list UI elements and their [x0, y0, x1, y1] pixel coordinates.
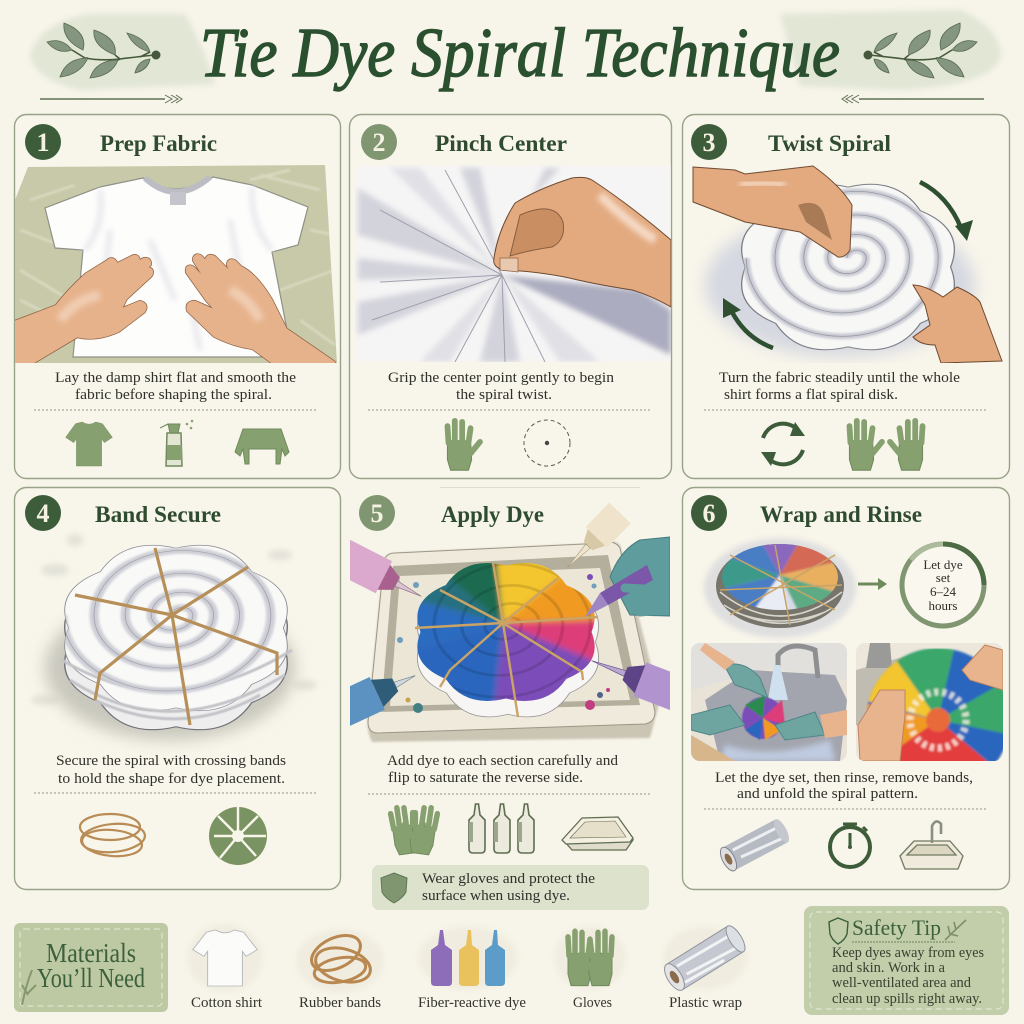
- description: Turn the fabric steadily until the whole: [719, 370, 960, 386]
- panel: step 2 pinch center: [350, 114, 672, 478]
- heading: Prep Fabric: [100, 131, 217, 156]
- heading: Twist Spiral: [768, 131, 891, 156]
- footer: materials: [14, 923, 749, 1012]
- illustration: tray and dye bottles: [331, 503, 686, 742]
- timer ring: let dye set 6-24 hours: [902, 544, 984, 626]
- illustration: shirt and hands: [14, 165, 339, 363]
- arrow: clockwise top right: [920, 182, 973, 241]
- item: plastic wrap: Plastic wrap: [669, 995, 742, 1011]
- icon: spray bottle: [160, 420, 193, 466]
- illustration: banded spiral: [31, 534, 317, 740]
- description: shirt forms a flat spiral disk.: [724, 387, 898, 403]
- description: Let the dye set, then rinse, remove bands,: [715, 770, 973, 786]
- materials label: Materials: [46, 938, 136, 968]
- photo: unfolding spiral: [856, 643, 1003, 771]
- metal tray: [368, 542, 660, 742]
- panel: step 3 twist spiral: [682, 114, 1010, 478]
- right leaf branch: [864, 23, 977, 78]
- description: Lay the damp shirt flat and smooth the: [55, 370, 296, 386]
- step number 3: 3: [702, 128, 716, 157]
- purple bottle and gloved hand: [585, 537, 670, 617]
- icon: sink: [900, 821, 963, 869]
- description: the spiral twist.: [456, 387, 552, 403]
- icon: gloves pair: [390, 804, 438, 855]
- heading: Pinch Center: [435, 131, 567, 156]
- arrow: clockwise bottom left: [723, 298, 773, 348]
- safety text: well-ventilated area and: [832, 975, 971, 991]
- item: cotton shirt: [191, 930, 263, 1011]
- icon: rubber bands: [80, 814, 146, 859]
- step number 6: [691, 495, 727, 531]
- item: rubber bands: [299, 928, 381, 1011]
- left leaf branch: [47, 23, 160, 78]
- item backdrops: [187, 924, 747, 993]
- heading: Band Secure: [95, 502, 221, 527]
- icon: shield: [829, 918, 848, 944]
- item: plastic wrap: [661, 923, 749, 1011]
- timer ring: let dye set 6-24 hours: 6–24: [930, 584, 956, 599]
- callout: protect surface: Wear gloves and protect the: [422, 871, 595, 887]
- materials label: [14, 923, 168, 1012]
- description: flip to saturate the reverse side.: [388, 770, 583, 786]
- pink bottle: [350, 540, 422, 597]
- item: gloves: Gloves: [573, 995, 612, 1011]
- timer ring: let dye set 6-24 hours: Let dye: [923, 557, 963, 572]
- materials label: You’ll Need: [37, 963, 145, 993]
- icon: rotate arrows: [761, 422, 805, 466]
- header: [30, 10, 1000, 103]
- safety text: [832, 945, 984, 1007]
- icon: right glove: [890, 421, 923, 470]
- timer ring: let dye set 6-24 hours: hours: [929, 598, 957, 613]
- icon: t-shirt: [66, 422, 112, 466]
- item: fiber-reactive dye: [418, 930, 526, 1011]
- step number 3: [691, 124, 727, 160]
- description: [715, 770, 973, 802]
- icon: stopwatch: [830, 824, 870, 867]
- icon: dashed center circle: [524, 420, 570, 466]
- description: fabric before shaping the spiral.: [75, 387, 272, 403]
- photo: rinsing at sink: [691, 643, 847, 761]
- panel: step 4 band secure: [14, 488, 340, 890]
- illustration: pinched fabric: [355, 165, 671, 362]
- description: Add dye to each section carefully and: [387, 753, 619, 769]
- icon: glove: [447, 421, 480, 470]
- step number 6: 6: [702, 499, 716, 528]
- illustration: spiral disk and hands: [693, 166, 1002, 363]
- timer ring: let dye set 6-24 hours: set: [936, 570, 951, 585]
- cream bottle: [567, 502, 630, 568]
- step number 2: 2: [372, 128, 386, 157]
- safety text: and skin. Work in a: [832, 960, 945, 976]
- right watercolor wash: [780, 10, 1000, 90]
- step number 4: 4: [36, 499, 50, 528]
- description: to hold the shape for dye placement.: [58, 771, 285, 787]
- description: Secure the spiral with crossing bands: [56, 753, 286, 769]
- item: rubber bands: Rubber bands: [299, 995, 381, 1011]
- item: fiber-reactive dye: Fiber-reactive dye: [418, 995, 526, 1011]
- icon: covered table: [235, 429, 289, 464]
- icon: three bottles: [469, 804, 534, 853]
- description: [55, 370, 296, 403]
- step number 5: [359, 495, 395, 531]
- step number 2: [361, 124, 397, 160]
- callout: protect surface: [372, 865, 649, 910]
- description: [387, 753, 619, 786]
- item: cotton shirt: Cotton shirt: [191, 995, 263, 1011]
- dye splatters: [397, 574, 610, 713]
- safety heading: Safety Tip: [852, 915, 941, 940]
- safety text: Keep dyes away from eyes: [832, 945, 984, 961]
- title: Tie Dye Spiral Technique: [200, 15, 840, 92]
- description: and unfold the spiral pattern.: [737, 786, 918, 802]
- icon: tray: [562, 817, 633, 850]
- callout: protect surface: surface when using dye.: [422, 888, 570, 904]
- left watercolor wash: [30, 14, 215, 90]
- description: [388, 370, 615, 403]
- left arrow line: [40, 95, 182, 103]
- icon: plastic wrap roll: [717, 817, 792, 873]
- panel: step 1 prep fabric: [14, 114, 340, 478]
- step number 5: 5: [370, 499, 384, 528]
- step number 4: [25, 495, 61, 531]
- description: [719, 370, 960, 403]
- icon: banded disk: [209, 806, 267, 865]
- purple bottle lower: [591, 660, 670, 710]
- heading: Wrap and Rinse: [760, 502, 922, 527]
- icon: left glove: [849, 421, 882, 470]
- description: Grip the center point gently to begin: [388, 370, 615, 386]
- safety tip box: [804, 906, 1009, 1015]
- step number 1: 1: [36, 128, 50, 157]
- panel: step 5 apply dye: [331, 488, 686, 910]
- right arrow line: [842, 95, 984, 103]
- blue bottle: [350, 675, 416, 726]
- arrow to timer: [858, 578, 887, 590]
- dyed spiral: [414, 562, 600, 718]
- description: [56, 753, 286, 787]
- step number 1: [25, 124, 61, 160]
- panel: step 6 wrap and rinse: [682, 488, 1010, 890]
- illustration: wrapped disk: [704, 538, 856, 638]
- heading: Apply Dye: [441, 502, 544, 527]
- item: gloves: [568, 932, 612, 1011]
- safety text: clean up spills right away.: [832, 991, 982, 1007]
